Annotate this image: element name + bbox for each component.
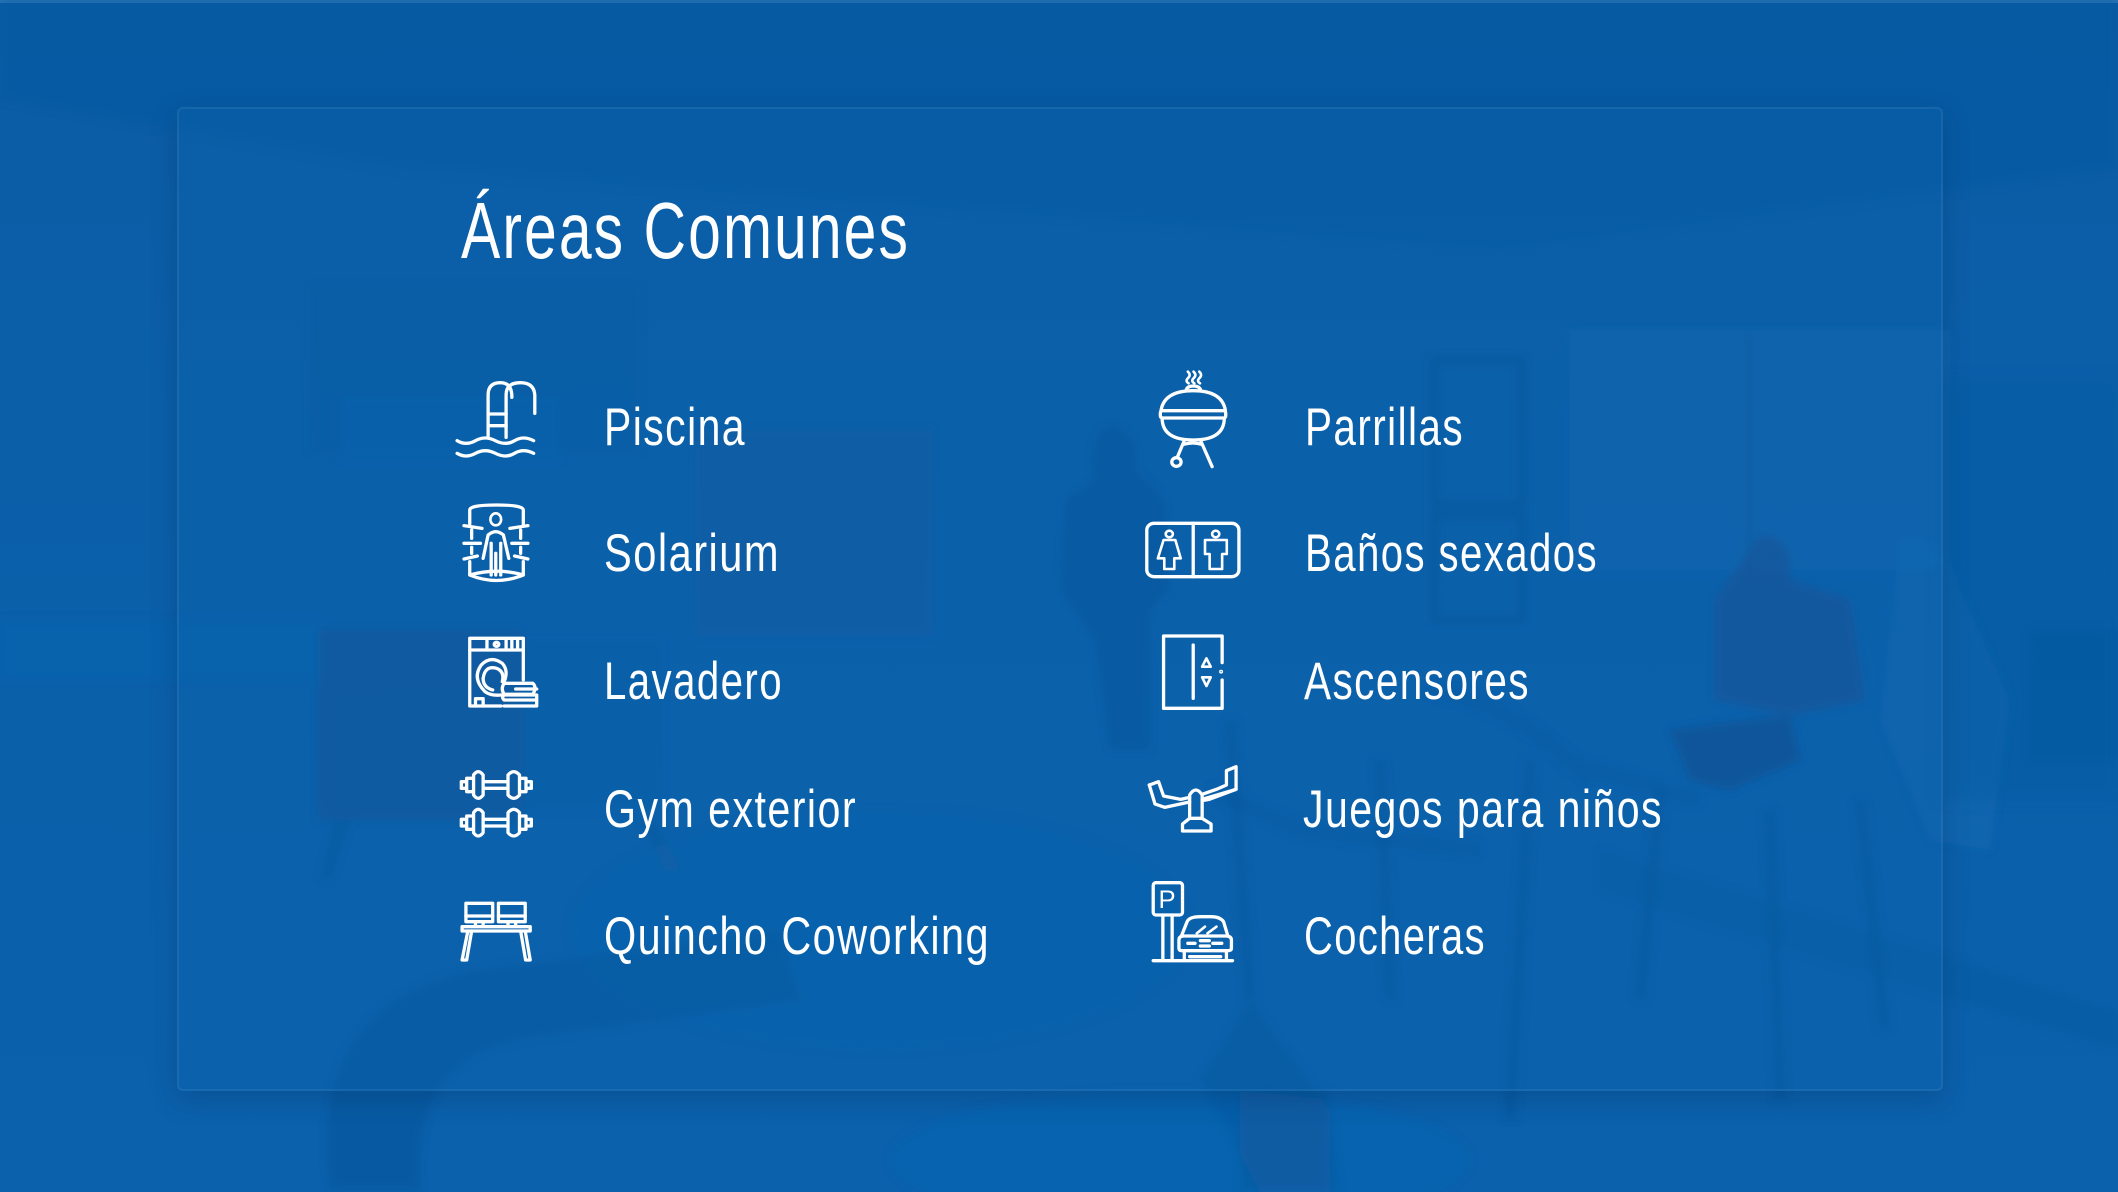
item: Solarium bbox=[464, 505, 780, 583]
label: Baños sexados: Baños sexados bbox=[1305, 524, 1598, 583]
icon: kettle grill with steam bbox=[1160, 372, 1226, 467]
label: Lavadero: Lavadero bbox=[604, 652, 783, 711]
item: Cocheras bbox=[1153, 883, 1486, 966]
icon: restroom sign bbox=[1147, 523, 1239, 577]
icon: elevator bbox=[1164, 636, 1222, 708]
icon: coworking desk with monitors bbox=[462, 903, 530, 960]
icon: pool ladder bbox=[457, 383, 535, 456]
heading: Áreas Comunes: Áreas Comunes bbox=[461, 186, 910, 275]
item: Gym exterior bbox=[461, 772, 857, 839]
label: Parrillas: Parrillas bbox=[1305, 398, 1464, 457]
item: Parrillas bbox=[1160, 372, 1464, 467]
label: Gym exterior: Gym exterior bbox=[604, 780, 857, 839]
label: Quincho Coworking: Quincho Coworking bbox=[604, 907, 990, 966]
item: Ascensores bbox=[1164, 636, 1530, 711]
icon: washing machine with towels bbox=[470, 638, 537, 706]
label: Piscina: Piscina bbox=[604, 398, 746, 457]
icon: two dumbbells bbox=[461, 772, 531, 836]
item: Quincho Coworking bbox=[462, 903, 990, 966]
icon: parking sign and car bbox=[1153, 883, 1232, 961]
item: Lavadero bbox=[470, 638, 783, 711]
label: Ascensores: Ascensores bbox=[1304, 652, 1530, 711]
panel: áreas comunes card bbox=[177, 107, 1943, 1091]
icon: tanning capsule bbox=[464, 505, 528, 580]
label: Solarium: Solarium bbox=[604, 524, 780, 583]
item: Baños sexados bbox=[1147, 523, 1598, 583]
item: Piscina bbox=[457, 383, 746, 457]
icon: seesaw bbox=[1149, 767, 1236, 831]
item: Juegos para niños bbox=[1149, 767, 1663, 839]
label: Juegos para niños: Juegos para niños bbox=[1303, 780, 1663, 839]
letter P on parking sign: P bbox=[1158, 886, 1176, 914]
label: Cocheras: Cocheras bbox=[1304, 907, 1486, 966]
